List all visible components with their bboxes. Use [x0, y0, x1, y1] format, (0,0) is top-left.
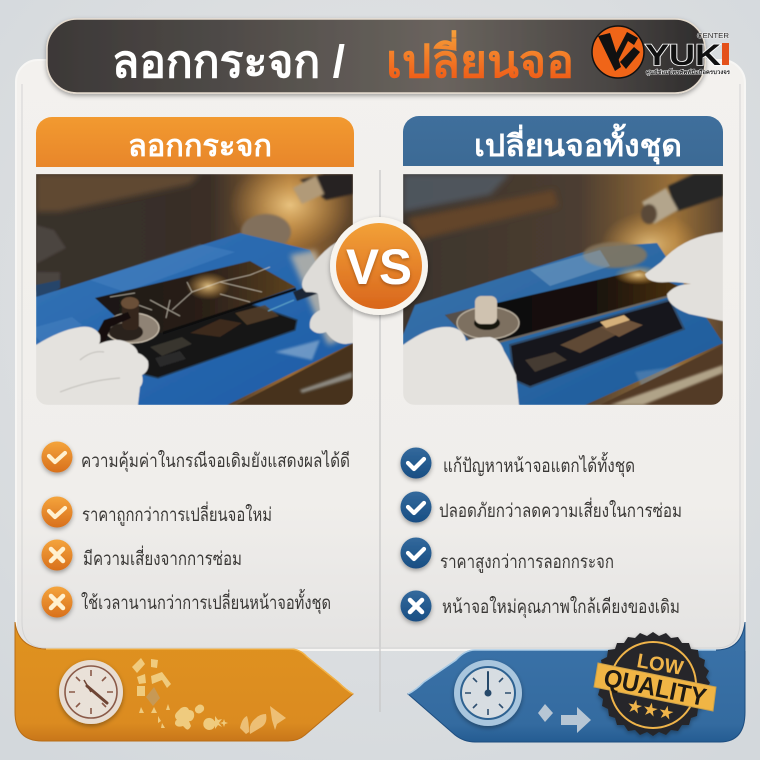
list: left pros and cons	[42, 442, 350, 618]
wood bench	[600, 345, 723, 405]
icon: check	[42, 496, 72, 528]
logo tagline: ศูนย์ซ่อมโทรศัพท์มือถือครบวงจร	[646, 68, 730, 77]
text: ความคุ้มค่าในกรณีจอเดิมยังแสดงผลได้ดี	[81, 450, 350, 473]
VS badge	[330, 217, 428, 315]
banner: left arrow	[15, 622, 353, 741]
text: ราคาสูงกว่าการลอกกระจก	[440, 552, 614, 573]
cracked glass	[95, 261, 296, 333]
phone body	[90, 302, 297, 378]
pry tool	[163, 289, 296, 333]
right glove	[645, 232, 723, 321]
badge ribbon	[594, 663, 716, 711]
badge: low quality	[594, 632, 716, 736]
text: มีความเสี่ยงจากการซ่อม	[83, 545, 242, 570]
item 3	[400, 538, 614, 573]
icon: check	[400, 538, 432, 568]
photo: full screen replacement	[403, 174, 723, 405]
new screen	[445, 270, 678, 342]
title: left: ลอกกระจก /	[112, 36, 345, 87]
logo red bar	[722, 43, 729, 65]
right glove	[302, 240, 353, 344]
item 2	[400, 492, 682, 522]
icon: check	[400, 492, 432, 522]
panel: main card	[16, 60, 745, 650]
logo badge	[592, 26, 644, 78]
text: หน้าจอใหม่คุณภาพใกล้เคียงของเดิม	[442, 596, 680, 619]
center divider	[379, 170, 381, 712]
icon: clock	[454, 660, 522, 726]
badge quality: QUALITY	[601, 664, 709, 712]
item 2	[42, 496, 272, 528]
hot air gun	[293, 174, 353, 204]
VS text: VS	[346, 239, 412, 295]
column header: left	[36, 117, 354, 167]
list: right pros and cons	[400, 448, 682, 622]
banner: right arrow	[408, 622, 745, 742]
icon: cross	[42, 540, 72, 570]
text: ใช้เวลานานกว่าการเปลี่ยนหน้าจอทั้งชุด	[81, 589, 331, 615]
column header: right	[403, 116, 723, 166]
badge ring	[610, 642, 696, 728]
blue mat	[36, 233, 353, 405]
photo: glass removal	[36, 160, 353, 405]
logo center label: CENTER	[697, 33, 729, 40]
icon: check	[400, 448, 432, 478]
item 3	[42, 540, 242, 570]
text: ราคาถูกกว่าการเปลี่ยนจอใหม่	[82, 501, 272, 526]
icon: cross	[400, 590, 432, 622]
item 1	[400, 448, 635, 478]
icon: clock	[59, 660, 123, 724]
left glove	[403, 327, 519, 405]
item 4	[42, 586, 331, 618]
item 1	[42, 442, 350, 473]
hot air gun	[641, 174, 723, 224]
header text: เปลี่ยนจอทั้งชุด	[474, 123, 682, 165]
logo wordmark: YUK	[645, 39, 721, 72]
badge low: LOW	[635, 650, 685, 680]
text: แก้ปัญหาหน้าจอแตกได้ทั้งชุด	[443, 452, 635, 478]
suction cup	[445, 295, 520, 340]
text: ปลอดภัยกว่าลดความเสี่ยงในการซ่อม	[439, 497, 682, 522]
header text: ลอกกระจก	[128, 130, 272, 163]
icon: cross	[42, 586, 72, 618]
title: right: เปลี่ยนจอ	[386, 30, 574, 87]
title pill	[47, 19, 705, 93]
icon: diamond	[538, 704, 553, 722]
logo: YUKI Center	[592, 26, 730, 78]
wood bench	[236, 344, 353, 405]
icon: check	[42, 442, 72, 472]
phone body	[510, 300, 684, 387]
icon: arrow	[561, 707, 591, 733]
suction cup	[97, 296, 160, 344]
badge seal	[596, 632, 710, 736]
badge stars: ★★★	[626, 698, 676, 723]
glass cracks	[110, 267, 270, 318]
left glove	[36, 327, 148, 405]
blue mat	[403, 243, 723, 405]
small tray	[241, 214, 291, 250]
glass shards	[132, 658, 286, 734]
item 4	[400, 590, 680, 622]
